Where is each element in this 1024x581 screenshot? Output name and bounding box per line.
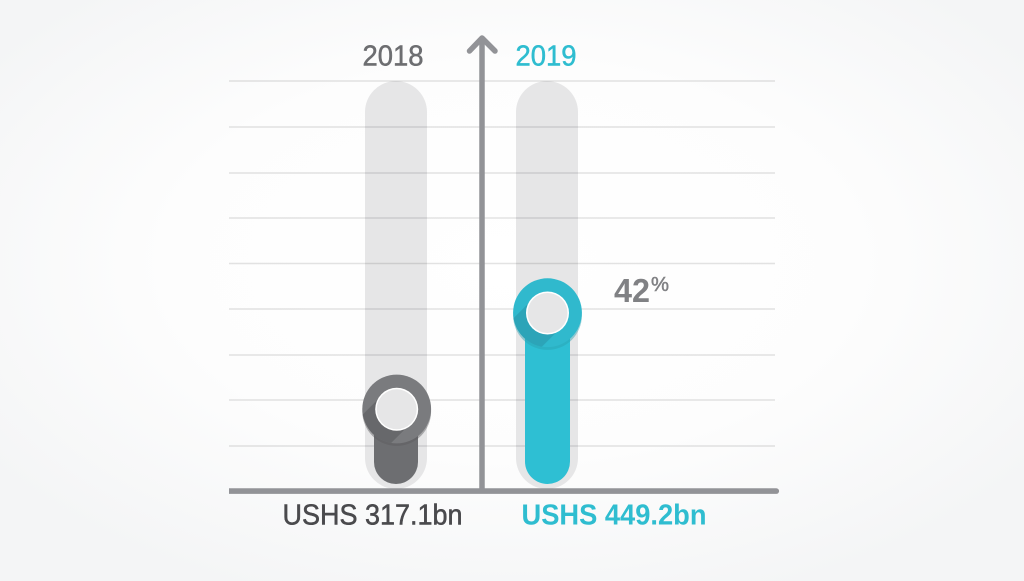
bar: 2019 value xyxy=(513,278,582,484)
callout: 42%: 42 xyxy=(614,272,650,309)
callout: 42%: % xyxy=(651,274,669,296)
bar: 2018 value xyxy=(362,374,432,484)
label: 2019: 2019 xyxy=(516,41,576,73)
vertical axis arrow xyxy=(470,38,495,491)
horizontal axis xyxy=(229,488,779,494)
track: 2018 xyxy=(365,81,427,489)
label: 2018: 2018 xyxy=(362,41,424,73)
value: 2018: USHS 317.1bn xyxy=(282,500,462,532)
track: 2019 xyxy=(516,81,578,489)
callout: 42% xyxy=(614,272,669,309)
value: 2019: USHS 449.2bn xyxy=(522,500,706,532)
